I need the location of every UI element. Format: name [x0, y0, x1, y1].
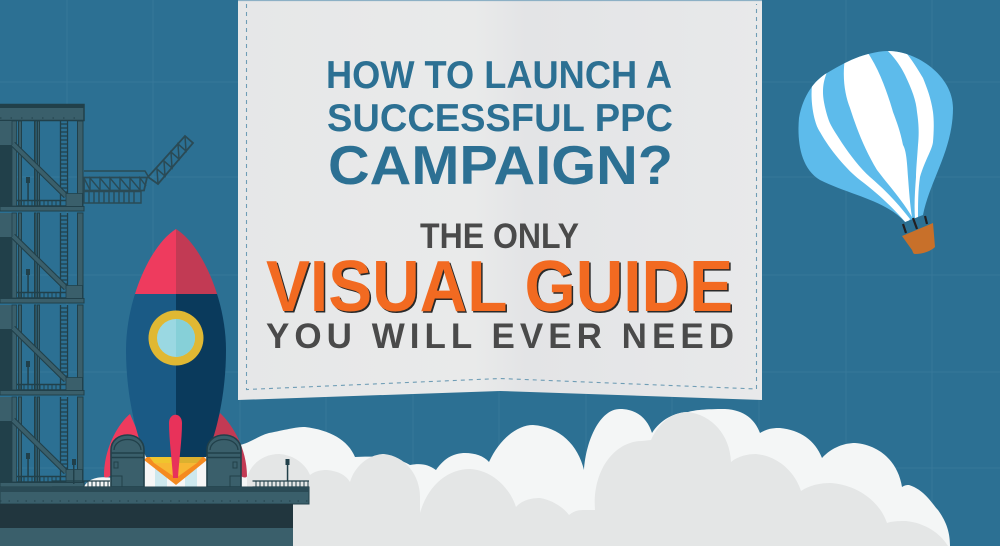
crane arm — [84, 136, 193, 203]
small white cloud behind rails — [84, 477, 112, 487]
right booster — [207, 435, 241, 487]
subtitle: visual guide: VISUAL GUIDE — [266, 247, 733, 327]
tower floor 3 — [0, 305, 84, 395]
title: how to launch: HOW TO LAUNCH A — [326, 54, 672, 97]
lamp on tower base — [72, 459, 76, 484]
rocket porthole — [148, 310, 204, 366]
subtitle: visual guide: VISUAL GUIDE — [268, 248, 734, 328]
subtitle: the only: THE ONLY — [420, 217, 579, 256]
platform deck — [0, 487, 309, 504]
rocket exhaust — [143, 450, 208, 487]
platform — [0, 459, 309, 546]
balloon basket — [902, 223, 935, 254]
subtitle: you will ever need: YOU WILL EVER NEED — [266, 317, 734, 356]
rocket fins — [104, 413, 247, 478]
balloon envelope — [798, 51, 953, 222]
tower floor 2 — [0, 213, 84, 303]
cloud: back layer — [240, 409, 950, 546]
banner panel — [238, 0, 762, 400]
lamp — [286, 459, 290, 481]
tower top beam — [0, 104, 84, 120]
balloon ropes — [903, 216, 927, 233]
left booster — [111, 435, 144, 487]
launch tower — [0, 104, 193, 487]
rocket body — [126, 229, 226, 457]
title: how to launch — [326, 54, 673, 196]
platform base — [0, 504, 293, 528]
rocket tail fin — [169, 415, 182, 478]
platform railings — [52, 481, 309, 487]
cloud: front layer — [247, 412, 948, 546]
tower floor 1 — [0, 121, 84, 211]
hot air balloon — [798, 51, 953, 254]
tower floor 4 — [0, 397, 84, 487]
rocket — [104, 225, 247, 487]
title: how to launch: CAMPAIGN? — [328, 134, 673, 196]
title: how to launch: SUCCESSFUL PPC — [327, 97, 673, 140]
